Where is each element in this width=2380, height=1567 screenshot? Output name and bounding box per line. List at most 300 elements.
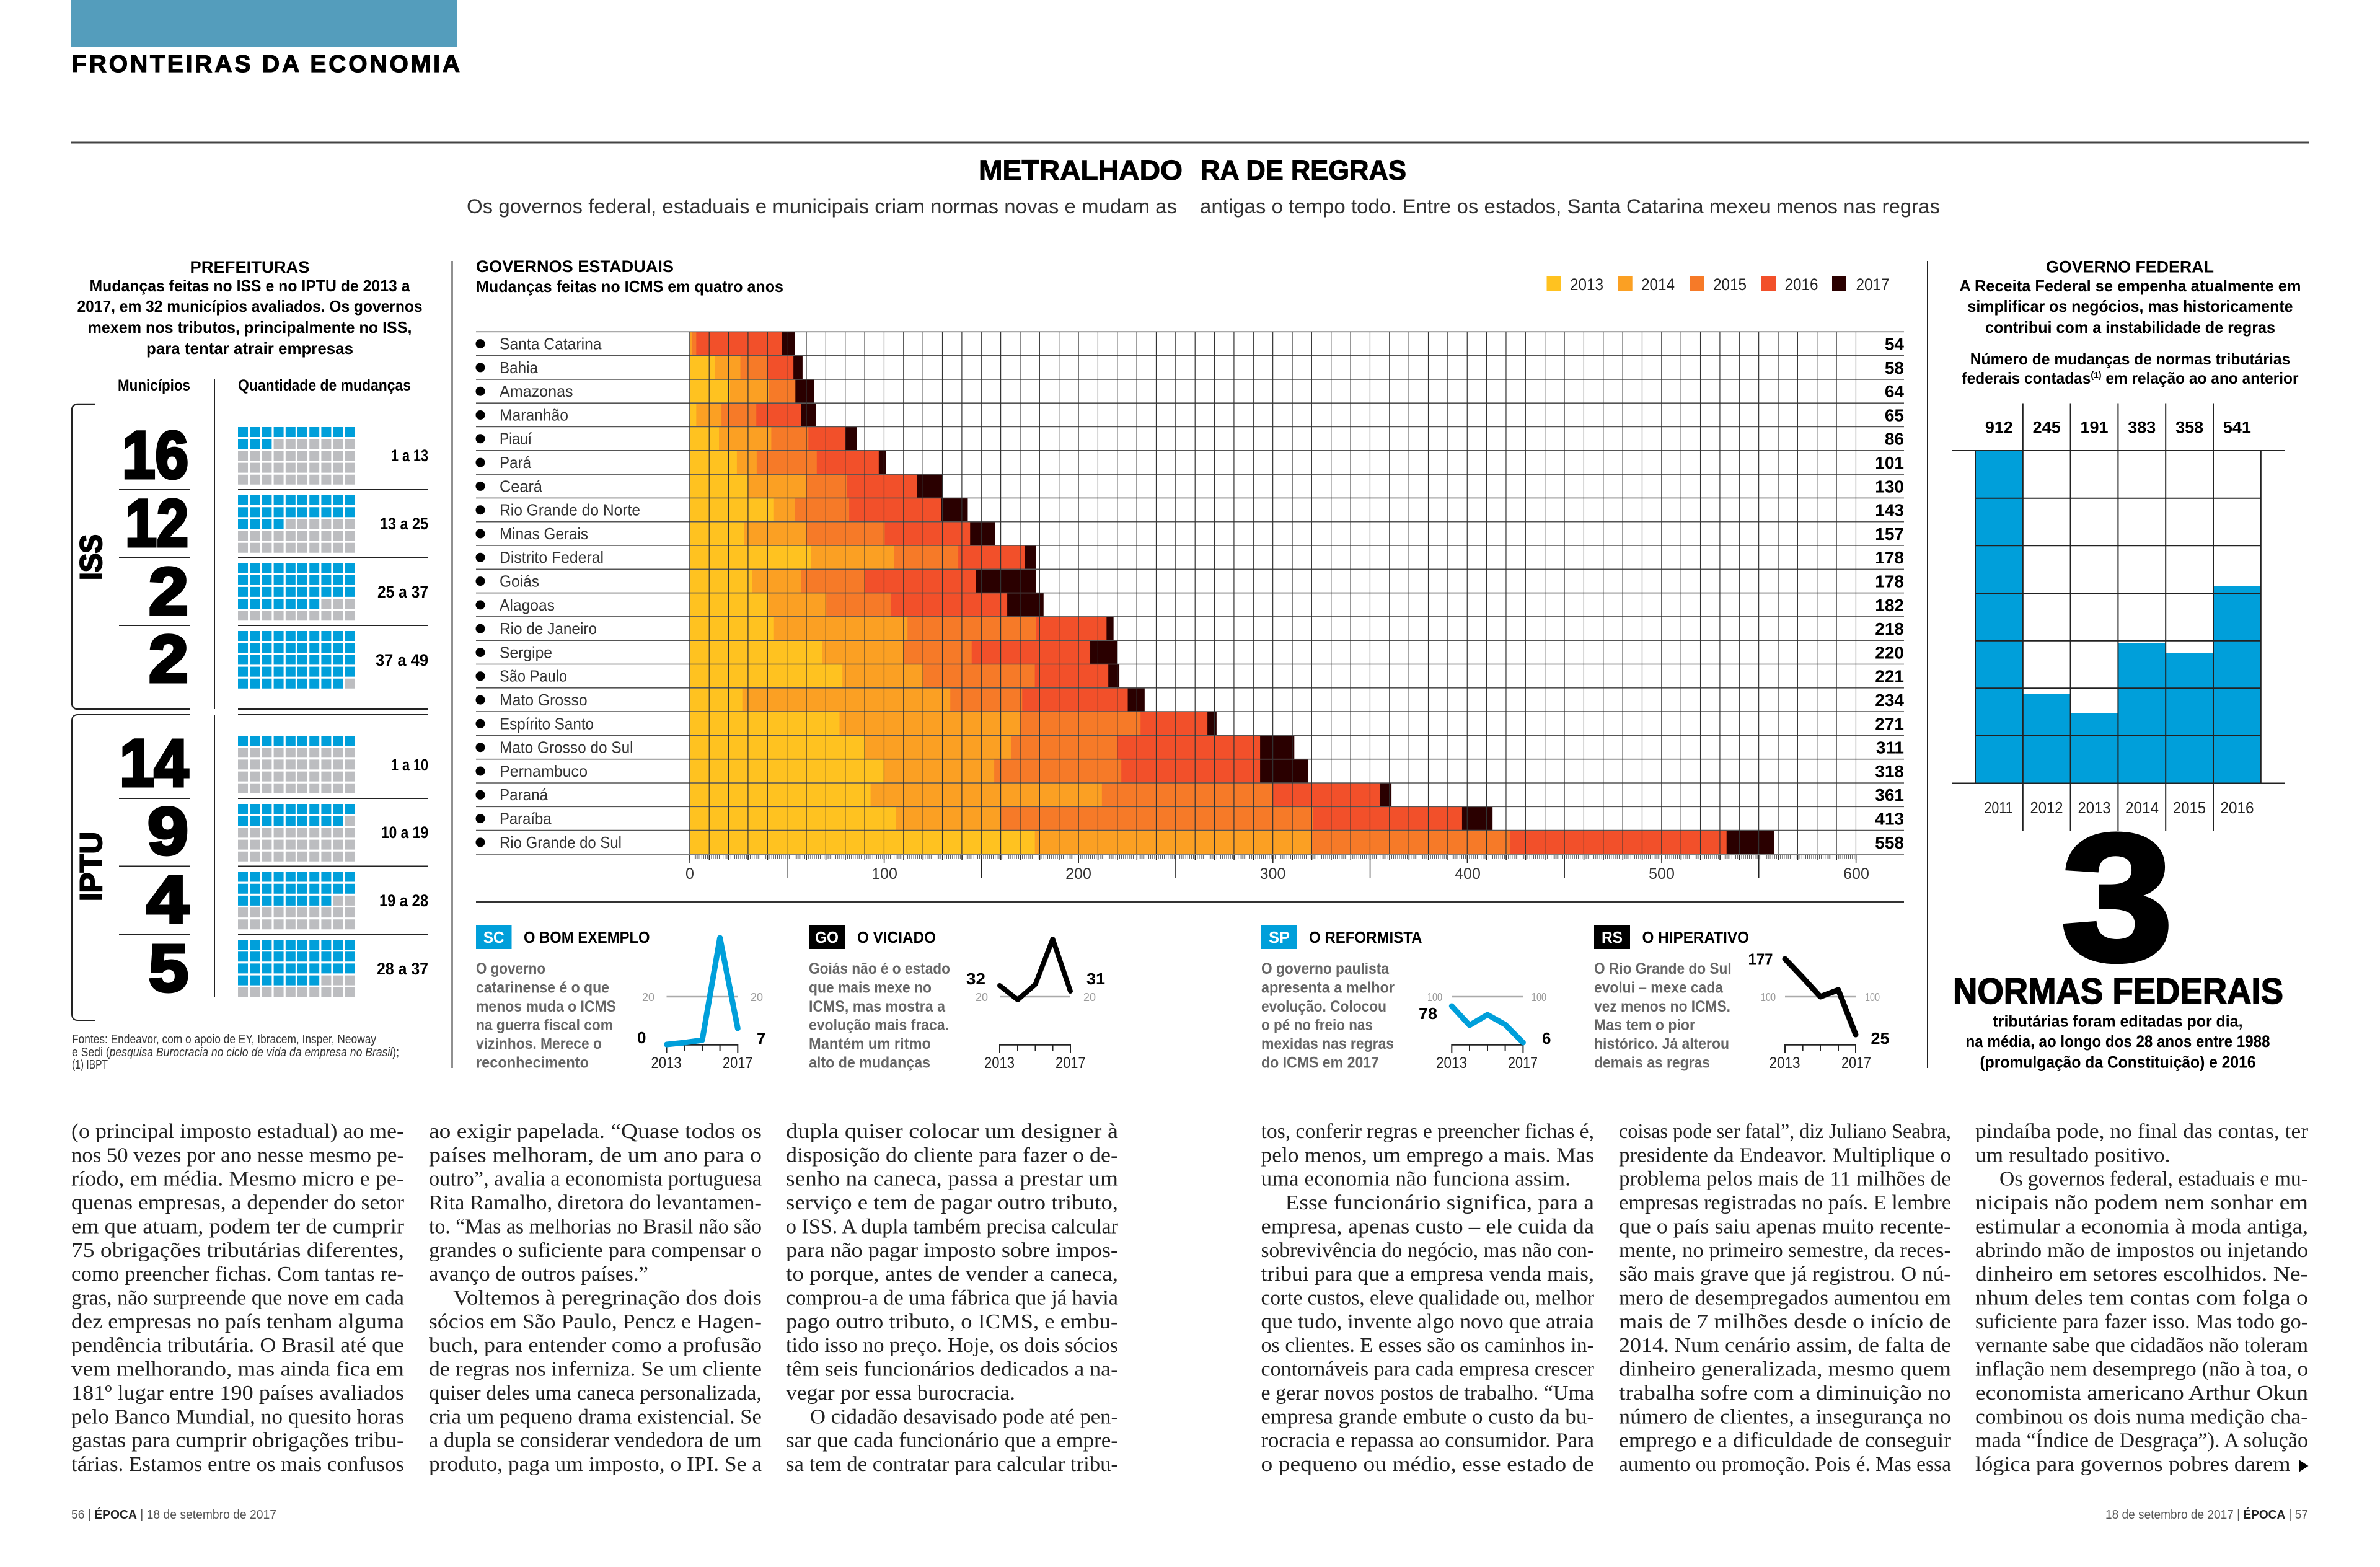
column 1: (o principal imposto estadual) ao me- (71, 1120, 404, 1143)
RS sparkline (1748, 950, 1889, 1072)
range labels: 25 a 37 (377, 583, 428, 601)
sources note: e Sedi (pesquisa Burocracia no ciclo de vida da empresa no Brasil); (72, 1046, 399, 1059)
column 5 (1619, 1120, 1952, 1476)
year labels: 2011 (1985, 798, 2013, 817)
column 5: aumento ou promoção. Pois é. Mas essa (1619, 1453, 1951, 1476)
state totals: 318 (1875, 762, 1904, 781)
column headers: Quantidade de mudanças (238, 377, 411, 394)
column 3: pago outro tributo, o ICMS, e embu- (786, 1310, 1118, 1333)
RS text: histórico. Já alterou (1594, 1035, 1729, 1053)
federal intro text (1960, 276, 2301, 387)
municipality counts: 5 (149, 930, 188, 1005)
state totals: 413 (1875, 810, 1904, 828)
SC sparkline: 7 (757, 1029, 765, 1048)
state labels: Espírito Santo (500, 714, 594, 733)
SP text: o pé no freio nas (1261, 1017, 1373, 1034)
SP sparkline: 100 (1427, 991, 1442, 1004)
column 4 (1261, 1120, 1595, 1476)
range labels: 13 a 25 (380, 514, 428, 533)
SC sparkline: 2017 (723, 1054, 752, 1072)
x axis: 300 (1260, 865, 1285, 883)
subtitle: antigas o tempo todo. Entre os estados, Santa Catarina mexeu menos nas regras (1200, 195, 1940, 218)
column 1: gastas para cumprir obrigações tribu- (71, 1429, 404, 1452)
SP sparkline: 78 (1419, 1004, 1437, 1023)
title: RA DE REGRAS (1201, 154, 1406, 186)
state totals: 86 (1885, 430, 1904, 449)
year labels: 2014 (2125, 798, 2159, 817)
state totals: 220 (1875, 643, 1904, 662)
state labels: Santa Catarina (500, 335, 602, 353)
SC text: vizinhos. Merece o (476, 1035, 602, 1053)
x axis (685, 857, 1869, 883)
state labels: Mato Grosso do Sul (500, 738, 633, 757)
municipality counts: 2 (149, 621, 188, 696)
legend: 2015 (1713, 275, 1747, 294)
legend (1547, 275, 1889, 294)
RS text: Mas tem o pior (1594, 1017, 1695, 1034)
column 4: contornáveis para cada empresa crescer (1261, 1358, 1595, 1381)
column 2: buch, para entender como a profusão (429, 1334, 762, 1357)
column 6: economista americano Arthur Okun (1975, 1382, 2308, 1405)
profile: SP o reformista: SP (1269, 928, 1290, 947)
column 6: pindaíba pode, no final das contas, ter (1975, 1120, 2309, 1143)
state totals: 182 (1875, 596, 1904, 615)
state labels: Maranhão (500, 405, 568, 424)
column 5: são mais grave que já registrou. O nú- (1619, 1263, 1951, 1286)
state totals: 101 (1875, 453, 1904, 472)
column 5: número de clientes, a insegurança no (1619, 1405, 1951, 1428)
federal intro text: simplificar os negócios, mas historicamente (1967, 297, 2293, 316)
profile: RS o hiperativo: RS (1602, 928, 1623, 947)
GO text: Mantém um ritmo (809, 1035, 931, 1053)
state labels: Mato Grosso (500, 691, 588, 709)
title (979, 154, 1406, 186)
municipality counts (120, 417, 188, 1005)
column 4: os clientes. E esses são os caminhos in- (1261, 1334, 1594, 1357)
column 2: a dupla se considerar vendedora de um (429, 1429, 762, 1452)
bar values: 358 (2175, 418, 2203, 436)
column 5: trabalha sofre com a diminuição no (1619, 1382, 1951, 1405)
RS sparkline: 100 (1865, 991, 1880, 1004)
normas federais text: na média, ao longo dos 28 anos entre 1988 (1966, 1032, 2270, 1051)
profile: GO o viciado (809, 925, 1105, 1072)
range labels: 1 a 10 (391, 756, 428, 774)
SP sparkline: 6 (1542, 1029, 1551, 1048)
column 4: e gerar novos postos de trabalho. “Uma (1261, 1382, 1594, 1405)
column 2: Rita Ramalho, diretora do levantamen- (429, 1191, 762, 1214)
subtitle: Os governos federal, estaduais e municipais criam normas novas e mudam as (467, 195, 1177, 218)
column 5: que o país saiu apenas muito recente- (1619, 1215, 1951, 1238)
municipality counts: 14 (120, 725, 188, 800)
GO text: alto de mudanças (809, 1054, 930, 1071)
range labels: 10 a 19 (381, 823, 428, 842)
range labels: 28 a 37 (377, 960, 428, 978)
profile: SC o bom exemplo (476, 925, 765, 1072)
column 5: problema pelos mais de 11 milhões de (1619, 1168, 1951, 1191)
column 1: em que atuam, podem ter de cumprir (71, 1215, 405, 1238)
SP sparkline: 100 (1532, 991, 1546, 1004)
GO sparkline: 20 (1083, 991, 1096, 1004)
stacked bar chart (689, 331, 1857, 855)
column 6: vernante sabe que cidadãos não toleram (1975, 1334, 2308, 1357)
state totals (1875, 335, 1904, 852)
column 3: o ISS. A dupla também precisa calcular (786, 1215, 1119, 1238)
x axis: 0 (685, 865, 694, 883)
bar values: 912 (1985, 418, 2013, 436)
bar values (1985, 418, 2251, 436)
column 1: vem melhorando, mas ainda fica em (71, 1358, 404, 1381)
GO text (809, 960, 950, 1071)
RS text (1594, 960, 1732, 1071)
waffle: ISS 1 a 13 (238, 432, 355, 480)
state labels: Paraíba (500, 810, 552, 828)
column 3: serviço e tem de pagar outro tributo, (786, 1191, 1118, 1214)
GO text: ICMS, mas mostra a (809, 998, 946, 1015)
column 4: empresa grande embute o custo da bu- (1261, 1405, 1594, 1428)
column 6: nhum deles tem contas com folga o (1975, 1287, 2308, 1309)
normas federais text: (promulgação da Constituição) e 2016 (1980, 1053, 2256, 1071)
SP text: mexidas nas regras (1261, 1035, 1394, 1053)
column 5: mais de 7 milhões desde o início de (1619, 1310, 1951, 1333)
label: ISS: ISS (74, 534, 108, 580)
column 4: tribui para que a empresa venda mais, (1261, 1263, 1594, 1286)
RS text: evolui – mexe cada (1594, 979, 1724, 997)
SP text: evolução. Colocou (1261, 998, 1386, 1015)
profile: SP o reformista (1261, 925, 1551, 1072)
bracket: ISS (72, 404, 428, 709)
profile: RS o hiperativo: O HIPERATIVO (1642, 928, 1749, 947)
federal intro text: federais contadas (1962, 369, 2099, 387)
legend: 2014 (1641, 275, 1675, 294)
SP text (1261, 960, 1395, 1071)
state totals: 361 (1875, 785, 1904, 805)
state totals: 271 (1875, 714, 1904, 733)
prefeituras intro text: 2017, em 32 municípios avaliados. Os governos (77, 297, 423, 316)
column 1: ríodo, em média. Mesmo micro e pe- (71, 1168, 404, 1191)
legend: 2016 (1785, 275, 1818, 294)
section tab: blue block (71, 0, 457, 47)
article text: right page (1261, 1120, 2309, 1476)
RS sparkline: 2017 (1841, 1054, 1871, 1072)
estaduais heading: Mudanças feitas no ICMS em quatro anos (476, 277, 783, 296)
column 1 (71, 1120, 405, 1476)
sources note: Fontes: Endeavor, com o apoio de EY, Ibracem, Insper, Neoway (72, 1033, 376, 1046)
GO sparkline (966, 939, 1105, 1072)
GO sparkline: 2013 (984, 1054, 1015, 1072)
federal bar chart (1952, 403, 2285, 831)
column 6: Os governos federal, estaduais e mu- (1999, 1168, 2308, 1191)
RS sparkline: 177 (1748, 950, 1773, 968)
SC sparkline (637, 938, 765, 1072)
state labels (476, 335, 640, 852)
federal intro text: Número de mudanças de normas tributárias (1970, 350, 2290, 368)
municipality counts: 16 (122, 417, 188, 492)
state totals: 558 (1875, 833, 1904, 852)
SP sparkline: 2017 (1508, 1054, 1538, 1072)
prefeituras intro text: mexem nos tributos, principalmente no ISS, (88, 318, 412, 337)
column 3: comprou-a de uma fábrica que já havia (786, 1287, 1118, 1309)
state totals: 130 (1875, 477, 1904, 496)
state totals: 64 (1885, 382, 1904, 401)
GO text: que mais mexe no (809, 979, 932, 997)
state totals: 178 (1875, 572, 1904, 591)
footer: right page: 18 de setembro de 2017 | ÉPOCA | 57 (2105, 1507, 2308, 1522)
state labels: Paraná (500, 785, 548, 804)
bar values: 383 (2128, 418, 2156, 436)
column 3: O cidadão desavisado pode até pen- (810, 1405, 1118, 1428)
state labels: Bahia (500, 358, 539, 377)
state labels: Piauí (500, 430, 532, 448)
column 3: tido isso no preço. Hoje, os dois sócios (786, 1334, 1118, 1357)
column 1: nos 50 vezes por ano nesse mesmo pe- (71, 1144, 404, 1167)
column 2: avanço de outros países.” (429, 1263, 648, 1286)
SP text: apresenta a melhor (1261, 979, 1395, 997)
x axis: 400 (1455, 865, 1481, 883)
estaduais heading: GOVERNOS ESTADUAIS (476, 257, 674, 276)
column 3: têm seis funcionários dedicados a na- (786, 1358, 1118, 1381)
article text: left page (71, 1120, 1119, 1476)
sources note (72, 1033, 399, 1072)
federal heading: GOVERNO FEDERAL (2046, 258, 2214, 276)
RS text: demais as regras (1594, 1054, 1710, 1071)
column 6: combinou os dois numa medição cha- (1975, 1405, 2308, 1428)
bar values: 541 (2223, 418, 2251, 436)
column 4: rocracia e repassa ao consumidor. Para (1261, 1429, 1594, 1452)
prefeituras heading: PREFEITURAS (190, 258, 310, 276)
range labels: 37 a 49 (376, 651, 428, 669)
municipality counts: 2 (149, 554, 188, 629)
x axis: 100 (871, 865, 897, 883)
state labels: Pernambuco (500, 762, 588, 780)
bracket: IPTU (72, 715, 428, 1020)
column 1: quenas empresas, a depender do setor (71, 1191, 405, 1214)
SP sparkline: 2013 (1436, 1054, 1467, 1072)
state totals: 65 (1885, 405, 1904, 425)
normas federais text (1966, 1012, 2270, 1071)
big number 3: 3 (2061, 797, 2173, 998)
column 4: tos, conferir regras e preencher fichas é, (1261, 1120, 1594, 1143)
label: IPTU: IPTU (74, 832, 108, 901)
column 1: 75 obrigações tributárias diferentes, (71, 1239, 404, 1262)
SC text: menos muda o ICMS (476, 998, 616, 1015)
column 1: pendência tributária. O Brasil até que (71, 1334, 404, 1357)
column 3: senho na caneca, passa a prestar um (786, 1168, 1118, 1191)
column 5: emprego e a dificuldade de conseguir (1619, 1429, 1952, 1452)
federal intro text: A Receita Federal se empenha atualmente em (1960, 276, 2301, 295)
column 3: sar que cada funcionário que a empre- (786, 1429, 1118, 1452)
column 2: sócios em São Paulo, Pencz e Hagen- (429, 1310, 762, 1333)
column 2: Voltemos à peregrinação dos dois (453, 1287, 762, 1309)
state labels: Rio Grande do Norte (500, 501, 640, 519)
year labels (1985, 798, 2254, 817)
column 3: sa tem de contratar para calcular tribu- (786, 1453, 1118, 1476)
column 4: sobrevivência do negócio, mas não con- (1261, 1239, 1594, 1262)
prefeituras intro text: Mudanças feitas no ISS e no IPTU de 2013 a (89, 276, 410, 295)
RS sparkline: 100 (1761, 991, 1776, 1004)
column 6: mada “Índice de Desgraça”). A solução (1975, 1429, 2308, 1452)
SP sparkline (1419, 991, 1551, 1072)
column 5: presidente da Endeavor. Multiplique o (1619, 1144, 1951, 1167)
federal intro text: contribui com a instabilidade de regras (1985, 318, 2275, 337)
state labels: Distrito Federal (500, 548, 604, 567)
column 2: grandes o suficiente para compensar o (429, 1239, 762, 1262)
column 1: dez empresas no país tenham alguma (71, 1310, 404, 1333)
state totals: 58 (1885, 358, 1904, 377)
column 2: quiser deles uma caneca personalizada, (429, 1382, 762, 1405)
column 6: dinheiro em setores escolhidos. Ne- (1975, 1263, 2308, 1286)
year labels: 2013 (2078, 798, 2111, 817)
column 3: disposição do cliente para fazer o de- (786, 1144, 1118, 1167)
GO text: Goiás não é o estado (809, 960, 950, 978)
state labels: Sergipe (500, 643, 552, 661)
column 3: para não pagar imposto sobre impos- (786, 1239, 1118, 1262)
column 2 (429, 1120, 762, 1476)
column 3: vegar por essa burocracia. (786, 1382, 1015, 1405)
year labels: 2012 (2030, 798, 2063, 817)
column 1: como preencher fichas. Com tantas re- (71, 1263, 404, 1286)
estaduais heading (476, 257, 783, 296)
column 3: dupla quiser colocar um designer à (786, 1120, 1118, 1143)
panel: prefeituras (72, 258, 428, 1072)
range labels: 19 a 28 (379, 891, 428, 910)
column 5: mero de desempregados aumentou em (1619, 1287, 1951, 1309)
column 6: um resultado positivo. (1975, 1144, 2171, 1167)
column 5: mente, no primeiro semestre, da reces- (1619, 1239, 1951, 1262)
column 5: empresas registradas no país. E lembre (1619, 1191, 1951, 1214)
SC text (476, 960, 616, 1071)
waffle: ISS 25 a 37 (238, 568, 355, 616)
state totals: 178 (1875, 548, 1904, 567)
state labels: Ceará (500, 477, 543, 495)
state labels: Rio Grande do Sul (500, 833, 622, 852)
column 4: Esse funcionário significa, para a (1285, 1191, 1594, 1214)
state totals: 221 (1875, 667, 1904, 686)
profile: SC o bom exemplo: O BOM EXEMPLO (524, 928, 650, 947)
state labels: Amazonas (500, 382, 573, 400)
bar values: 191 (2080, 418, 2109, 436)
RS sparkline: 2013 (1769, 1054, 1800, 1072)
column 2: to. “Mas as melhorias no Brasil não são (429, 1215, 762, 1238)
column 6: estimular a economia à moda antiga, (1975, 1215, 2308, 1238)
column 5: dinheiro generalizada, mesmo quem (1619, 1358, 1951, 1381)
section name: FRONTEIRAS DA ECONOMIA (72, 51, 460, 77)
state totals: 234 (1875, 691, 1904, 710)
column 6 (1975, 1120, 2309, 1476)
panel: governos estaduais (476, 257, 1904, 1072)
state labels: Alagoas (500, 596, 555, 614)
year labels: 2015 (2173, 798, 2206, 817)
SC sparkline: 20 (751, 991, 763, 1004)
column headers: Municípios (118, 377, 190, 394)
RS sparkline: 25 (1871, 1029, 1889, 1048)
column 1: tárias. Estamos entre os mais confusos (71, 1453, 404, 1476)
waffle: IPTU 28 a 37 (238, 945, 355, 992)
state totals: 311 (1876, 738, 1904, 757)
column 1: pelo Banco Mundial, no quesito horas (71, 1405, 404, 1428)
municipality counts: 9 (148, 793, 188, 868)
SC sparkline: 0 (637, 1028, 646, 1047)
prefeituras intro text (77, 276, 423, 358)
SC text: na guerra fiscal com (476, 1017, 613, 1034)
column 2: cria um pequeno drama existencial. Se (429, 1405, 762, 1428)
column 6: nicipais não podem nem sonhar em (1975, 1191, 2308, 1214)
GO text: evolução mais fraca. (809, 1017, 949, 1034)
column 4: corte custos, eleve qualidade ou, melhor (1261, 1287, 1595, 1309)
waffle: ISS 13 a 25 (238, 500, 355, 548)
column 4: pelo menos, um emprego a mais. Mas (1261, 1144, 1594, 1167)
column 4: o pequeno ou médio, esse estado de (1261, 1453, 1594, 1476)
normas federais headline: NORMAS FEDERAIS (1953, 971, 2283, 1012)
column 2: países melhoram, de um ano para o (429, 1144, 762, 1167)
bar values: 245 (2033, 418, 2061, 436)
column headers (118, 377, 411, 394)
x axis: 200 (1065, 865, 1091, 883)
waffle: IPTU 19 a 28 (238, 876, 355, 924)
SC text: reconhecimento (476, 1054, 589, 1071)
RS text: vez menos no ICMS. (1594, 998, 1730, 1015)
state totals: 143 (1875, 501, 1904, 520)
year labels: 2016 (2220, 798, 2254, 817)
x axis: 500 (1649, 865, 1675, 883)
state totals: 157 (1875, 524, 1904, 544)
state labels: Goiás (500, 572, 539, 590)
column 4: que tudo, invente algo novo que atraia (1261, 1310, 1594, 1333)
SP text: O governo paulista (1261, 960, 1390, 978)
state labels: Pará (500, 453, 531, 472)
column 6: suficiente para fazer isso. Mas todo go- (1975, 1310, 2308, 1333)
waffle: IPTU 10 a 19 (238, 809, 355, 857)
SP text: do ICMS em 2017 (1261, 1054, 1379, 1071)
column 2: outro”, avalia a economista portuguesa (429, 1168, 762, 1191)
column 5: coisas pode ser fatal”, diz Juliano Seabra, (1619, 1120, 1951, 1143)
waffle: ISS 37 a 49 (238, 636, 355, 684)
column 2: de regras nos inferniza. Se um cliente (429, 1358, 762, 1381)
subtitle (467, 195, 1940, 218)
SC sparkline: 2013 (651, 1054, 682, 1072)
range labels (376, 446, 428, 978)
SC text: catarinense é o que (476, 979, 609, 997)
sources note: (1) IBPT (72, 1058, 108, 1072)
municipality counts: 4 (146, 862, 188, 937)
column 2: produto, paga um imposto, o IPI. Se a (429, 1453, 762, 1476)
profile: GO o viciado: O VICIADO (857, 928, 936, 947)
municipality counts: 12 (125, 485, 188, 560)
SC text: O governo (476, 960, 545, 978)
column 5: 2014. Num cenário assim, de falta de (1619, 1334, 1951, 1357)
waffle: IPTU 1 a 10 (238, 741, 355, 788)
panel: governo federal (1952, 258, 2301, 1071)
state totals: 218 (1875, 619, 1904, 638)
GO sparkline: 31 (1086, 969, 1105, 988)
legend: 2017 (1856, 275, 1889, 294)
column 3 (786, 1120, 1119, 1476)
SC sparkline: 20 (642, 991, 654, 1004)
profile: SP o reformista: O REFORMISTA (1309, 928, 1422, 947)
prefeituras intro text: para tentar atrair empresas (146, 339, 353, 358)
profile: GO o viciado: GO (815, 928, 839, 947)
x axis: 600 (1843, 865, 1869, 883)
state labels: Minas Gerais (500, 524, 588, 543)
column 6: lógica para governos pobres darem (1975, 1453, 2291, 1476)
state labels: São Paulo (500, 667, 567, 686)
profile: RS o hiperativo (1594, 925, 1889, 1072)
GO sparkline: 32 (966, 969, 985, 988)
footer: left page: 56 | ÉPOCA | 18 de setembro de 2017 (71, 1507, 276, 1522)
GO sparkline: 20 (976, 991, 988, 1004)
range labels: 1 a 13 (391, 446, 428, 465)
column 2: ao exigir papelada. “Quase todos os (429, 1120, 762, 1143)
profile: SC o bom exemplo: SC (483, 928, 505, 947)
